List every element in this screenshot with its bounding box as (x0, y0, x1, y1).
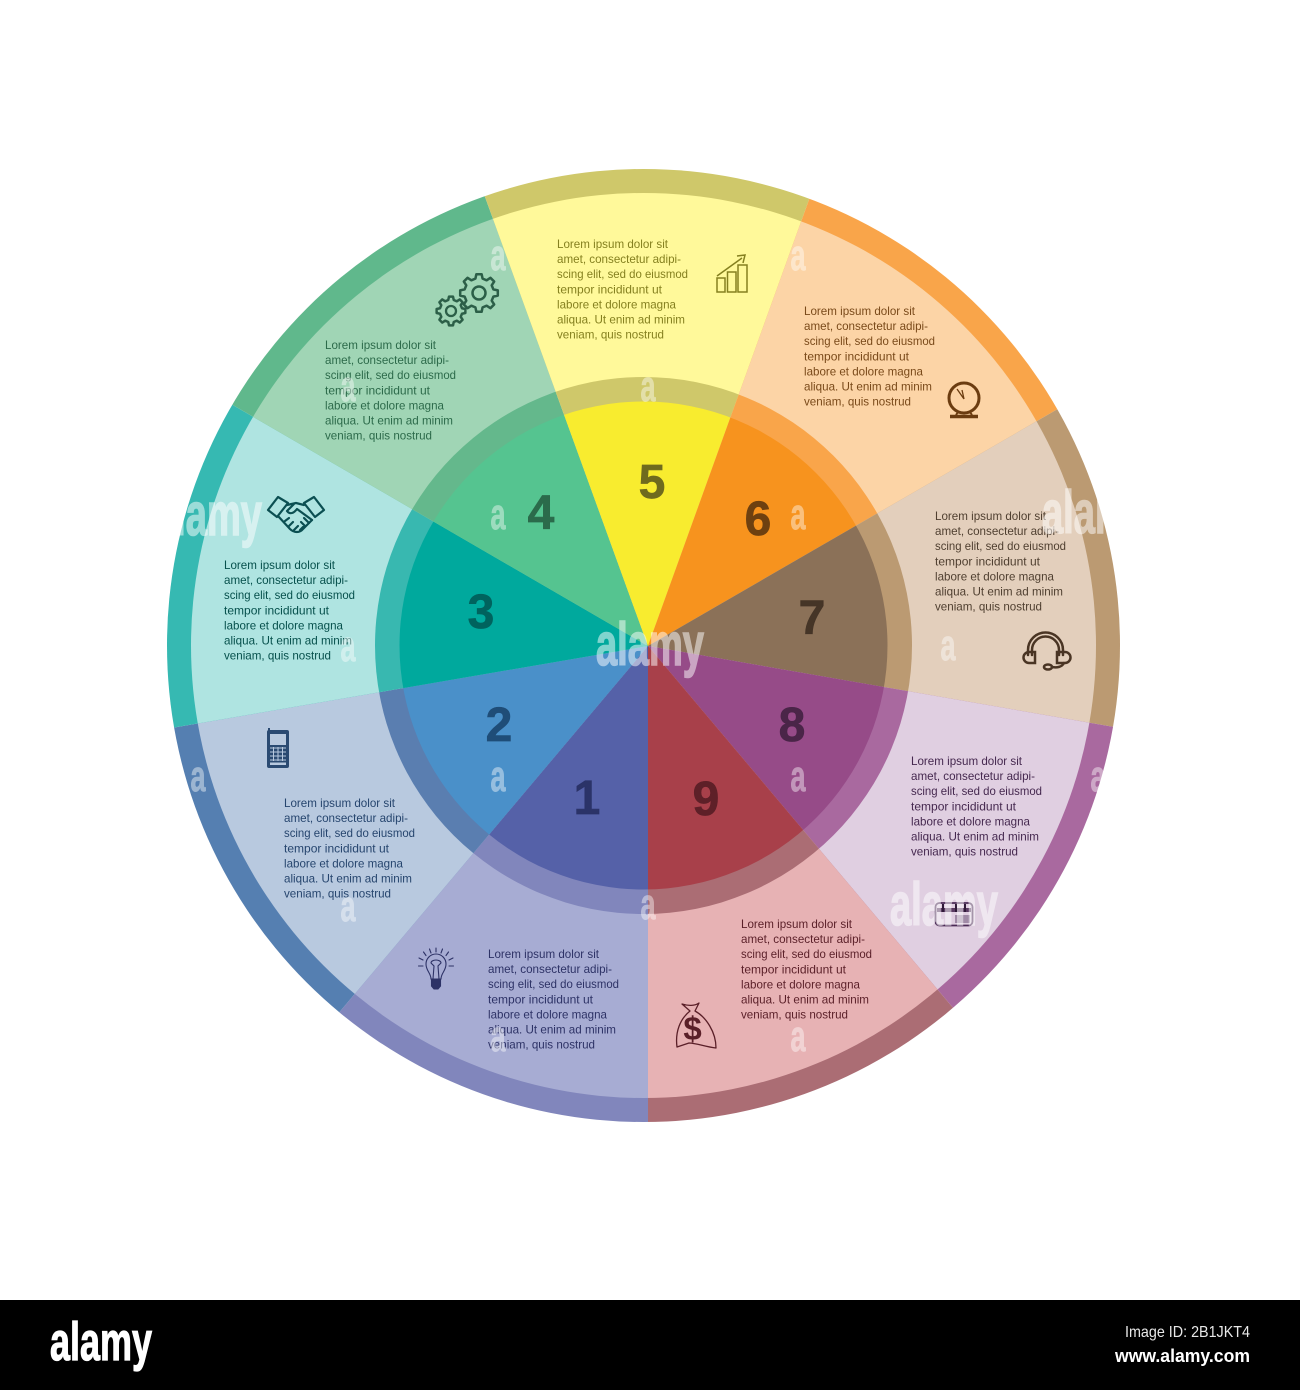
text block: segment 3: tempor incididunt ut (224, 604, 330, 617)
text block: segment 6: tempor incididunt ut (804, 350, 910, 363)
segment 3 outer rim (167, 404, 412, 728)
text block: segment 4: tempor incididunt ut (325, 384, 431, 397)
icon: credit card (936, 903, 972, 926)
segment 1 core (490, 646, 648, 890)
text block: segment 7: veniam, quis nostrud (935, 601, 1042, 614)
panel: segment 2 (174, 646, 648, 1012)
text block: segment 2: labore et dolore magna (284, 857, 404, 870)
watermark: small alamy marks: a (790, 231, 806, 280)
panel: segment 8 (648, 646, 1113, 1008)
segment 6 inner ring (648, 394, 878, 646)
text block: segment 2: scing elit, sed do eiusmod (284, 827, 415, 840)
panel: segment 5 (484, 169, 810, 646)
text block: segment 4: labore et dolore magna (325, 399, 445, 412)
text block: segment 9: aliqua. Ut enim ad minim (741, 994, 869, 1006)
icon: gears (437, 274, 498, 325)
text block: segment 1: labore et dolore magna (488, 1008, 608, 1021)
panel: segment 6 (648, 198, 1058, 646)
text block: segment 4: amet, consectetur adipi- (325, 354, 449, 367)
segment 3 inner ring (375, 509, 648, 692)
text block: segment 7 (935, 510, 1066, 614)
segment 1 light panel (355, 854, 648, 1098)
text block: segment 5 (557, 238, 688, 342)
icon: handshake (268, 497, 324, 532)
text block: segment 4: Lorem ipsum dolor sit (325, 339, 437, 352)
text block: segment 9: scing elit, sed do eiusmod (741, 948, 872, 961)
watermark: small alamy marks: a (490, 490, 506, 539)
watermark: small alamy marks: a (340, 362, 356, 411)
footer bar (0, 1300, 1300, 1390)
segment 7 inner ring (648, 514, 912, 691)
text block: segment 5: veniam, quis nostrud (557, 329, 664, 342)
number 7: 7 (799, 592, 825, 645)
text block: segment 9: tempor incididunt ut (741, 963, 847, 976)
text block: segment 3: amet, consectetur adipi- (224, 574, 348, 587)
website: www.alamy.com (1114, 1346, 1250, 1366)
number 9: 9 (693, 773, 719, 826)
segment 5 light panel (493, 193, 801, 646)
segment 4 inner ring (412, 392, 638, 640)
text block: segment 3: aliqua. Ut enim ad minim (224, 634, 352, 648)
segment 3 light panel (191, 417, 648, 724)
segment 5 core (564, 402, 730, 646)
watermark: small alamy marks: a (190, 752, 206, 801)
text block: segment 4 (325, 339, 456, 443)
watermark: small alamy marks: a (790, 752, 806, 801)
text block: segment 8 (911, 755, 1042, 859)
watermark: small alamy marks: a (490, 752, 506, 801)
watermark: large alamy marks: alamy (1042, 479, 1150, 546)
icon: light bulb (418, 948, 454, 989)
text block: segment 4: scing elit, sed do eiusmod (325, 369, 456, 382)
watermark: small alamy marks: a (1090, 752, 1106, 801)
segment 2 outer rim (174, 692, 488, 1012)
text block: segment 6: Lorem ipsum dolor sit (804, 305, 916, 318)
text block: segment 1: aliqua. Ut enim ad minim (488, 1024, 616, 1036)
text block: segment 2: Lorem ipsum dolor sit (284, 797, 396, 810)
segment 4 outer rim (232, 196, 630, 636)
watermark: small alamy marks: a (340, 622, 356, 671)
segment 9 inner ring (648, 646, 1013, 1250)
text block: segment 7: scing elit, sed do eiusmod (935, 540, 1066, 553)
text block: segment 5: Lorem ipsum dolor sit (557, 238, 669, 251)
number 6: 6 (745, 493, 771, 546)
segment 6 light panel (648, 222, 1036, 646)
number 8: 8 (779, 699, 805, 752)
icon: money bag: $ (683, 1010, 702, 1047)
watermark: small alamy marks (190, 231, 1106, 1061)
segment 8 inner ring (648, 646, 908, 848)
text block: segment 4: aliqua. Ut enim ad minim (325, 414, 453, 428)
segment 2 inner ring (379, 646, 648, 853)
text block: segment 5: aliqua. Ut enim ad minim (557, 314, 685, 326)
image id: Image ID: 2B1JKT4 (1125, 1324, 1250, 1341)
text block: segment 8: aliqua. Ut enim ad minim (911, 830, 1039, 844)
text block: segment 1 (488, 948, 619, 1052)
panel: segment 3 (167, 404, 648, 728)
watermark: small alamy marks: a (640, 362, 656, 411)
watermark: small alamy marks: a (340, 882, 356, 931)
text block: segment 6 (804, 305, 935, 409)
text block: segment 9: Lorem ipsum dolor sit (741, 918, 853, 931)
text block: segment 1: tempor incididunt ut (488, 993, 594, 1006)
watermark: small alamy marks: a (790, 1012, 806, 1061)
text block: segment 2 (284, 797, 415, 901)
footer logo: alamy (50, 1312, 152, 1372)
watermark: small alamy marks: a (490, 231, 506, 280)
text block: segment 6: amet, consectetur adipi- (804, 320, 928, 333)
icon: mobile phone (267, 728, 289, 768)
icon: headset (1024, 632, 1070, 670)
text block: segment 9: amet, consectetur adipi- (741, 933, 865, 946)
segment 4 core (434, 415, 648, 646)
text block: segment 2: aliqua. Ut enim ad minim (284, 872, 412, 886)
segment 9 light panel (648, 646, 1013, 1250)
number 4: 4 (528, 487, 555, 540)
text block: segment 5: labore et dolore magna (557, 298, 677, 311)
segment 2 core (404, 646, 648, 834)
text block: segment 7: Lorem ipsum dolor sit (935, 510, 1047, 523)
segment 8 light panel (649, 646, 1090, 990)
text block: segment 7: tempor incididunt ut (935, 555, 1041, 568)
text block: segment 9 (741, 918, 872, 1022)
number 1: 1 (574, 772, 600, 825)
text block: segment 3 (224, 559, 355, 663)
watermark: small alamy marks: a (940, 621, 956, 670)
text block: segment 3: labore et dolore magna (224, 619, 344, 632)
icon: clock (949, 383, 979, 416)
text block: segment 8: tempor incididunt ut (911, 800, 1017, 813)
text block: segment 3: scing elit, sed do eiusmod (224, 589, 355, 602)
text block: segment 7: amet, consectetur adipi- (935, 525, 1059, 538)
number 5: 5 (639, 456, 665, 509)
watermark: large alamy marks: alamy (154, 481, 262, 548)
text block: segment 1: veniam, quis nostrud (488, 1039, 595, 1052)
text block: segment 4: veniam, quis nostrud (325, 430, 432, 443)
panel: segment 4 (232, 196, 648, 646)
segment 5 outer rim (484, 169, 810, 646)
segment 1 inner ring (474, 834, 648, 914)
text block: segment 7: labore et dolore magna (935, 570, 1055, 583)
number 2: 2 (486, 699, 512, 752)
watermark: large alamy marks: alamy (890, 871, 998, 938)
panel: segment 1 (339, 646, 648, 1122)
segment 6 core (648, 418, 856, 646)
text block: segment 1: Lorem ipsum dolor sit (488, 948, 600, 961)
watermark: small alamy marks: a (640, 880, 656, 929)
number 3: 3 (468, 586, 494, 639)
text block: segment 2: amet, consectetur adipi- (284, 812, 408, 825)
text block: segment 9: labore et dolore magna (741, 978, 861, 991)
watermark: large alamy marks: alamy (596, 611, 704, 678)
segment 7 light panel (648, 422, 1096, 722)
text block: segment 8: scing elit, sed do eiusmod (911, 785, 1042, 798)
watermark: small alamy marks: a (790, 490, 806, 539)
segment 3 core (400, 522, 648, 688)
text block: segment 1: scing elit, sed do eiusmod (488, 978, 619, 991)
text block: segment 2: veniam, quis nostrud (284, 888, 391, 901)
segment 8 outer rim (820, 687, 1113, 1008)
icon: bar chart with arrow (717, 255, 747, 292)
segment 9 outer rim (648, 646, 1013, 1250)
text block: segment 1: amet, consectetur adipi- (488, 963, 612, 976)
text block: segment 3: Lorem ipsum dolor sit (224, 559, 336, 572)
watermark: large alamy marks (154, 479, 1150, 938)
text block: segment 8: veniam, quis nostrud (911, 846, 1018, 859)
text block: segment 8: labore et dolore magna (911, 815, 1031, 828)
segment 9 core (648, 646, 1013, 1250)
text block: segment 8: Lorem ipsum dolor sit (911, 755, 1023, 768)
text block: segment 6: scing elit, sed do eiusmod (804, 335, 935, 348)
segment 5 inner ring (556, 377, 738, 646)
segment 2 light panel (198, 656, 640, 994)
text block: segment 5: amet, consectetur adipi- (557, 253, 681, 266)
segment 1 outer rim (339, 854, 648, 1122)
text block: segment 6: aliqua. Ut enim ad minim (804, 380, 932, 394)
segment 6 outer rim (738, 198, 1058, 514)
segment 7 core (648, 526, 888, 687)
watermark: small alamy marks: a (490, 1012, 506, 1061)
segment 4 light panel (253, 219, 648, 646)
text block: segment 6: labore et dolore magna (804, 365, 924, 378)
icon: money bag (677, 1003, 716, 1048)
text block: segment 5: scing elit, sed do eiusmod (557, 268, 688, 281)
text block: segment 8: amet, consectetur adipi- (911, 770, 1035, 783)
text block: segment 2: tempor incididunt ut (284, 842, 390, 855)
text block: segment 6: veniam, quis nostrud (804, 396, 911, 409)
panel: segment 9 (648, 646, 1013, 1250)
panel: segment 7 (648, 409, 1120, 727)
segment 7 outer rim (858, 409, 1120, 727)
segment 8 core (648, 646, 884, 830)
text block: segment 3: veniam, quis nostrud (224, 650, 331, 663)
text block: segment 9: veniam, quis nostrud (741, 1009, 848, 1022)
text block: segment 5: tempor incididunt ut (557, 283, 663, 296)
text block: segment 7: aliqua. Ut enim ad minim (935, 586, 1063, 598)
